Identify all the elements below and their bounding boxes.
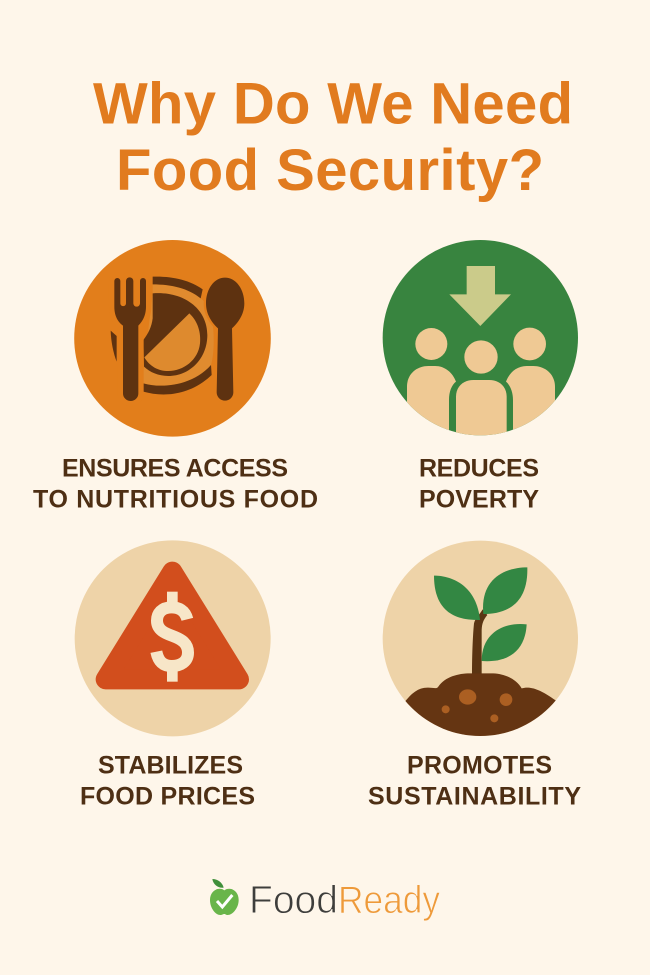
label: POVERTY — [419, 486, 539, 514]
panel: ensures access to nutritious food — [33, 240, 318, 513]
title: Food Security? — [116, 138, 544, 203]
title — [93, 72, 573, 203]
icon: people and down arrow — [383, 240, 578, 447]
label — [80, 752, 255, 810]
label: FOOD PRICES — [80, 782, 255, 810]
label: PROMOTES — [407, 752, 552, 780]
leaves — [434, 567, 527, 661]
panel: promotes sustainability — [368, 541, 581, 810]
wordmark: Food — [249, 879, 338, 922]
title: Why Do We Need — [93, 72, 573, 136]
icon: seedling in soil — [382, 540, 578, 736]
icon: triangle with dollar sign — [75, 540, 271, 736]
icon: spoon — [206, 278, 244, 401]
icon: plate and cutlery — [111, 277, 244, 401]
icon: orange circle — [74, 240, 271, 437]
label: STABILIZES — [98, 752, 243, 780]
label — [419, 454, 539, 514]
arrow — [449, 266, 511, 326]
label: ENSURES ACCESS — [62, 454, 288, 482]
label: REDUCES — [419, 454, 539, 482]
panel: reduces poverty — [383, 240, 578, 514]
panel: stabilizes food prices — [75, 540, 271, 810]
label: SUSTAINABILITY — [368, 782, 581, 810]
icon: fork — [114, 277, 146, 401]
logo: FoodReady — [210, 879, 440, 922]
icon: apple with check — [210, 879, 239, 915]
logo: FoodReady: Ready — [338, 879, 440, 922]
label — [368, 752, 581, 810]
label — [33, 454, 318, 514]
soil — [406, 673, 556, 736]
people — [407, 328, 555, 447]
label: TO NUTRITIOUS FOOD — [33, 486, 318, 514]
stem — [472, 609, 487, 675]
